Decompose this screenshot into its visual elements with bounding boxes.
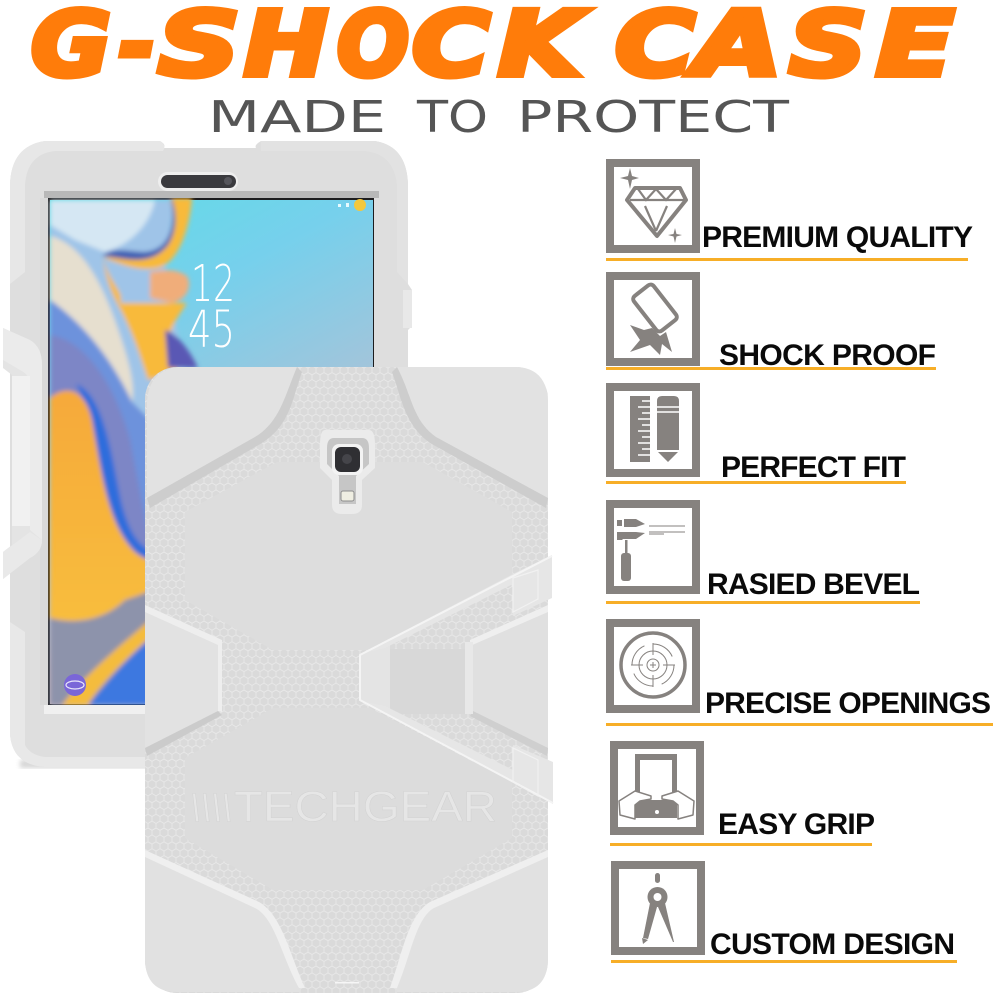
subtitle: made to protect: MADE <box>208 92 386 143</box>
tablet back view <box>145 367 553 993</box>
top left bumper shadow <box>147 367 302 508</box>
rugged case frame <box>10 141 412 767</box>
left side strap <box>3 328 42 579</box>
bottom right bumper <box>390 850 548 992</box>
royal blue ribbon <box>76 384 145 560</box>
purple spot <box>165 330 198 368</box>
bottom port mark <box>335 982 359 984</box>
side buttons on right <box>403 290 412 328</box>
smooth upper panel <box>185 462 512 650</box>
lock screen clock: 45 <box>188 301 235 360</box>
feature: perfect fit <box>606 387 906 484</box>
soft shadow under front case <box>20 760 150 768</box>
icon: diamond <box>610 163 696 249</box>
embossed brand logo: \\\\ <box>190 788 232 830</box>
screen wallpaper <box>48 198 374 705</box>
underline <box>606 601 920 604</box>
camera slot <box>158 172 238 191</box>
top right bumper shadow <box>392 367 548 508</box>
camera cutout <box>320 430 375 514</box>
label: SHOCK PROOF <box>719 339 936 372</box>
lock screen clock: 12 <box>191 255 235 314</box>
smooth lower panel <box>185 708 512 890</box>
label: CUSTOM DESIGN <box>710 928 955 961</box>
label: EASY GRIP <box>718 808 875 841</box>
underline <box>606 481 906 484</box>
top left bumper <box>147 367 297 498</box>
underline <box>606 367 936 370</box>
feature: precise openings <box>606 623 993 726</box>
icon: tablet impact <box>610 276 696 362</box>
peach swirl <box>150 270 189 303</box>
right middle bumper <box>470 605 548 756</box>
embossed brand logo: TECHGEAR <box>234 783 497 831</box>
cream wedge <box>50 236 133 402</box>
yellow ribbon <box>103 198 192 380</box>
top right bumper <box>397 367 548 498</box>
status icons <box>338 199 366 211</box>
mid blue field <box>48 300 145 532</box>
icon: calipers <box>610 504 696 590</box>
feature: easy grip <box>610 745 875 846</box>
subtitle: made to protect <box>208 92 789 143</box>
subtitle: made to protect: TO <box>416 92 488 143</box>
label: PREMIUM QUALITY <box>702 221 973 254</box>
label: PERFECT FIT <box>721 451 906 484</box>
label: RASIED BEVEL <box>707 568 920 601</box>
orange blob <box>50 391 155 622</box>
tablet front view <box>3 141 412 768</box>
pale blue upper left <box>48 198 184 416</box>
feature: raised bevel <box>606 504 920 604</box>
icon: target <box>610 623 696 709</box>
underline <box>611 960 957 963</box>
feature: custom design <box>611 865 957 963</box>
underline <box>610 843 872 846</box>
lock screen clock <box>190 264 232 348</box>
browser app icon <box>64 674 86 696</box>
back case body <box>145 367 548 993</box>
icon: hands holding tablet <box>614 745 700 831</box>
underline <box>606 258 968 261</box>
indigo ribbon <box>102 198 175 260</box>
left middle bumper <box>145 605 222 756</box>
bottom left bumper <box>145 850 305 992</box>
underline <box>606 723 993 726</box>
feature: shock proof <box>606 276 936 372</box>
label: PRECISE OPENINGS <box>705 687 991 720</box>
kickstand <box>360 555 553 804</box>
icon: drawing compass <box>615 865 701 951</box>
lower left <box>50 590 155 705</box>
title: G-SHOCK CASE <box>31 0 954 96</box>
subtitle: made to protect: PROTECT <box>517 92 789 143</box>
feature: premium quality <box>606 163 973 261</box>
icon: ruler and pencil <box>610 387 696 473</box>
